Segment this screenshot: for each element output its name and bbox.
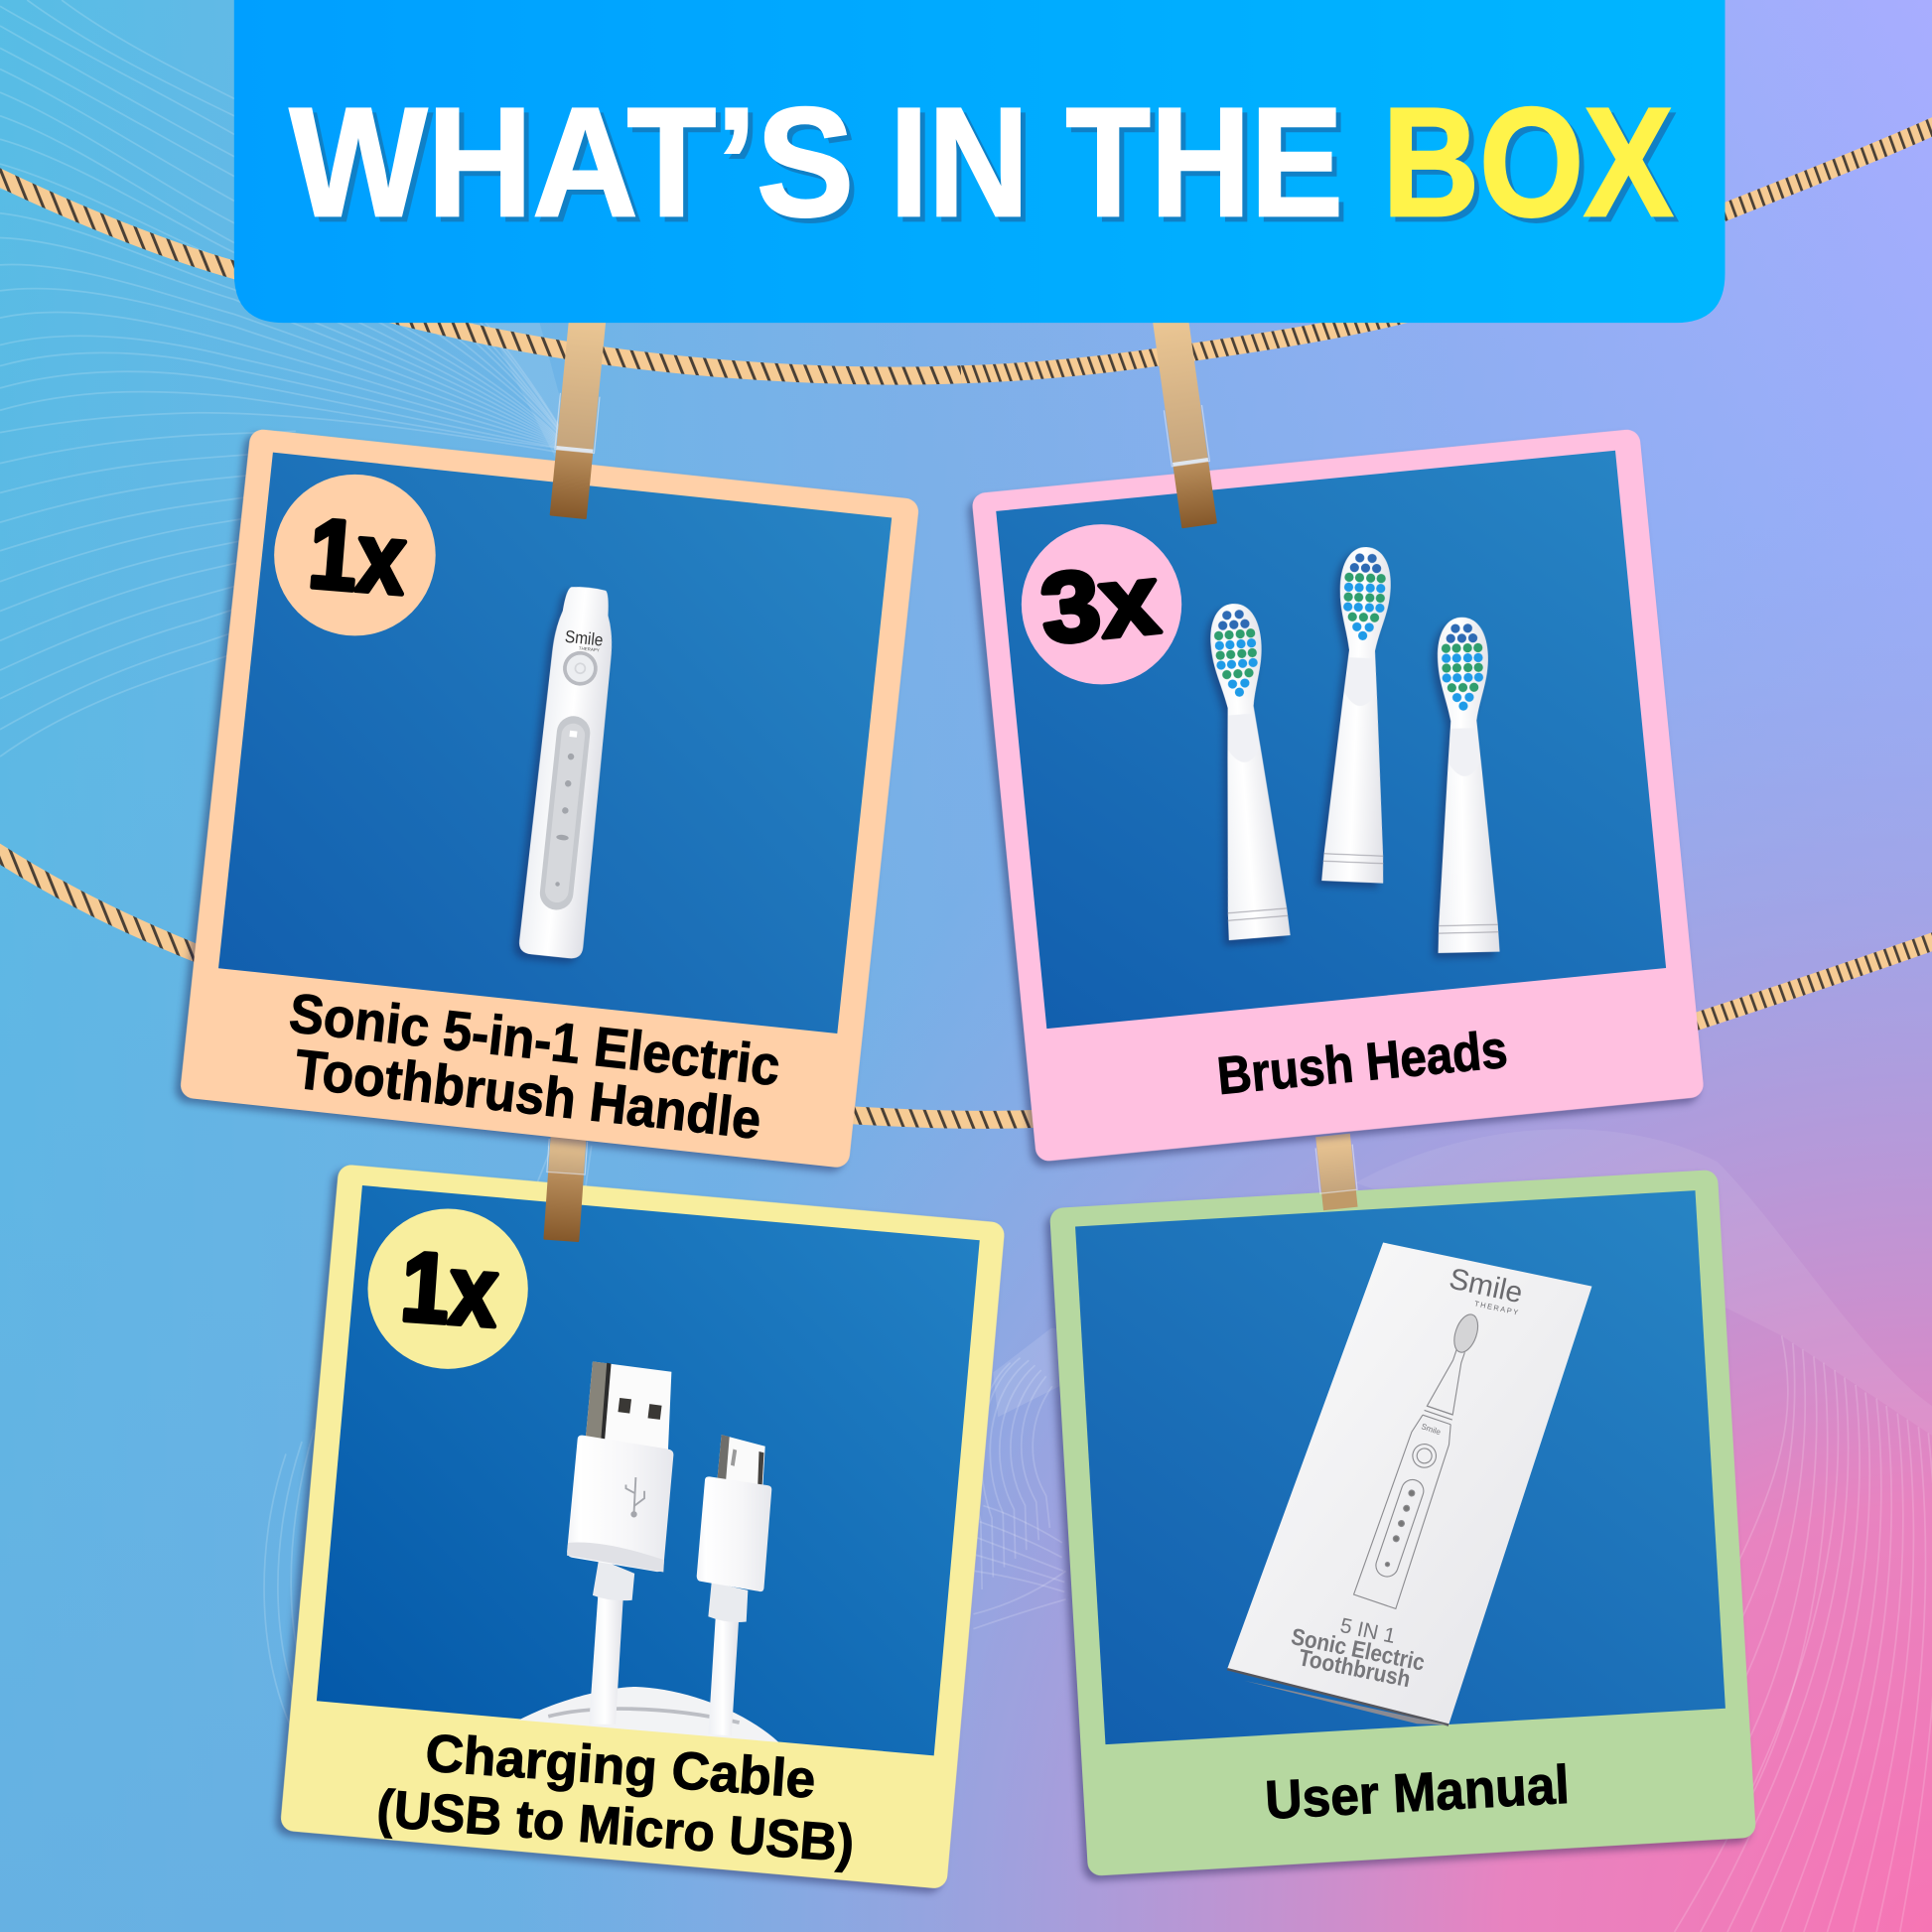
illustration: toothbrush handle: Smile [564,626,604,650]
card: handle frame [180,428,919,1169]
title: IN [890,75,1029,249]
manual text: Toothbrush [1297,1644,1413,1692]
manual text: 5 IN 1 [1338,1614,1398,1648]
rope: top line [0,123,1932,376]
panel: toothbrush handle [180,428,919,1169]
panel: brush heads [971,429,1705,1163]
illustration: USB cable [518,1361,778,1742]
illustration: toothbrush handle [518,584,621,960]
caption: brush heads: Brush Heads [1215,1021,1510,1106]
photo: charging cable background [317,1185,980,1755]
light beam behind first peg [486,323,579,469]
caption: charging cable: Charging Cable [424,1725,817,1810]
illustration: middle brush head [1321,546,1397,884]
manual logo: THERAPY [1473,1299,1519,1317]
rope: lower line [0,850,1932,1120]
manual toothbrush line drawing: Smile [1420,1422,1443,1437]
illustration: right brush head [1431,617,1500,953]
title [290,75,1673,249]
panel: charging cable [280,1164,1006,1889]
manual logo: Smile [1447,1262,1526,1310]
quantity badge: 1x [274,475,436,635]
clothespin: peach card [548,314,608,519]
illustration: toothbrush handle: THERAPY [579,645,600,653]
photo: brush heads background [996,451,1666,1029]
card: charging cable frame [280,1164,1006,1889]
card: brush heads frame [971,429,1705,1163]
quantity badge: 1x: 1x [398,1231,501,1348]
quantity badge: 3x: 3x [1036,544,1164,665]
clothespin: yellow card [542,1133,588,1242]
clothespin: green card [1314,1133,1359,1210]
title: WHAT’S [290,75,854,249]
quantity badge: 3x [1022,524,1181,684]
panel: user manual [1049,1170,1756,1876]
caption: user manual: User Manual [1264,1754,1571,1831]
USB symbol [625,1477,644,1517]
illustration: manual booklet [1227,1242,1591,1725]
wave band: between lower cards [993,1328,1072,1417]
caption: toothbrush handle: Toothbrush Handle [292,1037,764,1151]
card: user manual frame [1049,1170,1756,1876]
manual toothbrush line drawing [1354,1308,1493,1608]
caption: charging cable [375,1725,856,1873]
illustration: left brush head [1201,602,1291,940]
header banner [234,0,1725,323]
caption: charging cable: (USB to Micro USB) [375,1779,856,1873]
caption: toothbrush handle [286,981,783,1151]
quantity badge: 1x: 1x [305,498,410,616]
caption: toothbrush handle: Sonic 5-in-1 Electric [286,981,783,1097]
wave band: lower right [1355,1129,1932,1436]
title: BOX [1382,75,1673,249]
manual text [1289,1614,1427,1692]
photo: user manual background [1075,1190,1725,1744]
quantity badge: 1x [367,1208,528,1369]
clothespin: pink card [1151,314,1218,529]
photo: handle background [218,453,892,1034]
title: THE [1066,75,1343,249]
manual text: Sonic Electric [1289,1623,1427,1676]
